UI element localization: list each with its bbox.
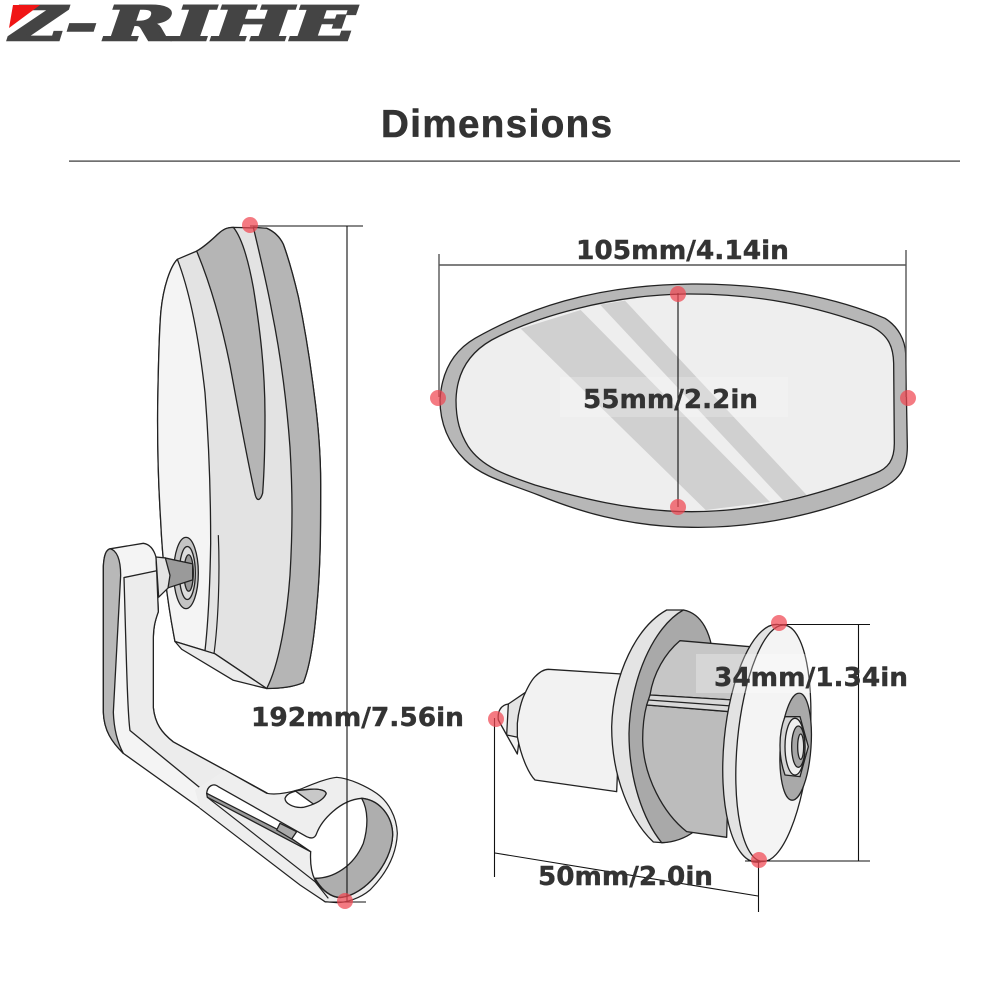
flange [612, 610, 717, 843]
dimension lines: 192mm [250, 226, 366, 902]
dimension lines: 105mm [439, 250, 906, 397]
label: 50mm: 50mm/2.0in [538, 862, 713, 892]
label backdrop 34mm [696, 654, 813, 693]
label: 34mm: 34mm/1.34in [714, 663, 908, 693]
top view: mirror glass [440, 284, 907, 527]
label: 192mm: 192mm/7.56in [251, 703, 464, 733]
label: 55mm: 55mm/2.2in [583, 385, 758, 415]
arm [103, 543, 325, 902]
front disc [713, 621, 820, 866]
dimension lines: 50mm [494, 718, 758, 912]
title: Dimensions [381, 103, 612, 146]
logo: Z-RIHE [8, 0, 358, 52]
side view: mirror and arm [103, 227, 397, 903]
dimension lines: 34mm [745, 624, 870, 861]
mount bolt [174, 537, 198, 609]
glass reflection stripes [521, 301, 807, 510]
body [643, 641, 750, 837]
measurement points [242, 217, 916, 909]
label: 105mm: 105mm/4.14in [576, 236, 789, 266]
title rule [69, 160, 960, 162]
mirror frame [440, 284, 907, 527]
dimension line: 55mm [677, 293, 679, 507]
label backdrop 55mm [560, 377, 788, 417]
shaft [517, 669, 622, 792]
mirror glass [456, 294, 894, 512]
bar end [498, 610, 820, 866]
bolt tip [498, 693, 525, 754]
mirror body [156, 227, 321, 689]
clamp [195, 770, 397, 903]
